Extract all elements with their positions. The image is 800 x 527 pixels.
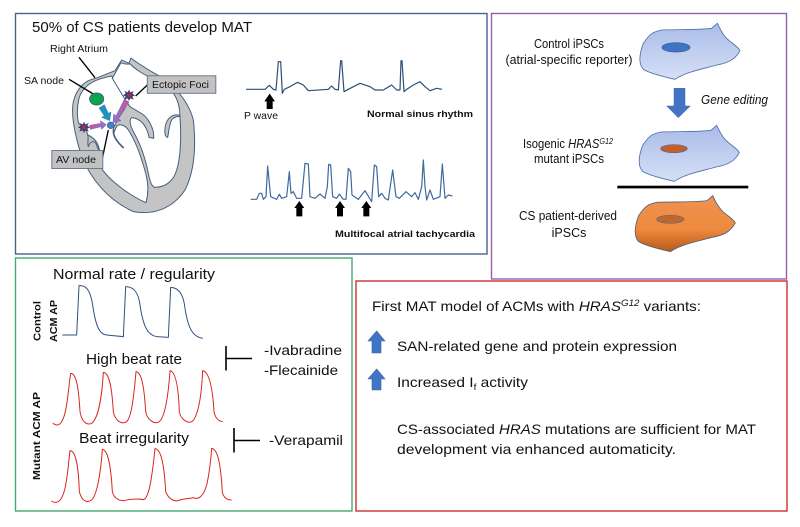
label: AV node: AV node [56,154,96,166]
icon: patient-derived cell [635,196,735,252]
heading: Normal rate / regularity: Normal rate / regularity [53,267,216,283]
chart: normal sinus rhythm ECG [246,61,442,109]
text: conclusion statement [397,421,756,457]
label: Control ACM AP: Control [32,301,44,341]
text: CS patient-derived iPSCs [519,209,617,240]
text: isogenic mutant iPSCs: Isogenic HRAS [523,137,603,151]
arrow: P wave [264,94,275,109]
text: gene editing: Gene editing [701,93,768,107]
text: isogenic mutant iPSCs: mutant iPSCs [534,152,604,166]
icon: ectopic focus upper [123,90,135,101]
text: increased If activity: Increased I [397,374,466,390]
panel: iPSC lines [492,14,786,279]
panel: conclusions [356,281,787,511]
icon: inhibition bar upper [226,346,252,370]
label: Multifocal atrial tachycardia: Multifocal atrial tachycardia [335,229,476,240]
heading: First MAT model: variants: [639,298,701,314]
text: increased If activity: activity [476,374,528,390]
divider line [617,186,748,188]
label: SA node: SA node [24,75,64,87]
arrows: MAT P waves [294,201,371,216]
icon: up arrow If [368,369,385,390]
text: control iPSCs [506,37,632,67]
text: CS patient-derived iPSCs: iPSCs [552,226,586,240]
label: Normal sinus rhythm: Normal sinus rhythm [367,109,473,120]
text: Ivabradine and Flecainide [264,342,342,378]
chart: multifocal atrial tachycardia ECG [251,160,452,216]
text: SAN-related expression: SAN-related gene and protein expression [397,338,677,354]
text: Ivabradine and Flecainide: -Ivabradine [264,342,342,358]
icon: ectopic focus lower [78,122,90,133]
arrow: lower focus to AV node [90,121,106,129]
leader lines [69,57,147,158]
heart diagram [69,57,195,213]
icon: inhibition bar lower [234,428,260,452]
icon: AV node [107,122,114,129]
panel: MAT clinical background [16,14,487,254]
chart: control AP trace [62,286,203,338]
arrow: SA node to AV node [99,105,111,121]
heading: First MAT model: G12 [621,298,639,308]
icon: control cell [640,23,740,79]
text: control iPSCs: (atrial-specific reporter) [506,53,632,67]
label: P wave: P wave [244,111,278,122]
label: Ectopic Foci [147,76,216,93]
label: Right Atrium: Right Atrium [50,43,108,55]
text: conclusion statement: CS-associated HRAS mutations are sufficient for MAT [397,421,756,437]
label: Ectopic Foci: Ectopic Foci [152,79,209,91]
heading: High beat rate: High beat rate [86,352,182,368]
text: Verapamil: -Verapamil [269,432,343,448]
text: isogenic mutant iPSCs [523,137,613,166]
label: Mutant ACM AP: Mutant ACM AP [32,392,43,480]
heading: First MAT model: First MAT model of ACMs with HRAS [372,298,618,314]
text: increased If activity: f [474,382,477,392]
icon: isogenic mutant cell [639,125,739,181]
chart: mutant AP beat irregularity [51,448,232,502]
text: conclusion statement: development via enhanced automaticity. [397,441,676,457]
text: isogenic mutant iPSCs: G12 [599,137,613,146]
heading: 50% of CS patients develop MAT: 50% of CS patients develop MAT [32,19,252,36]
text: control iPSCs: Control iPSCs [534,37,604,51]
text: Ivabradine and Flecainide: -Flecainide [264,362,338,378]
chart: mutant AP high beat rate [53,371,223,425]
icon: up arrow SAN [368,331,385,353]
panel: action potentials [16,258,352,511]
text: CS patient-derived iPSCs: CS patient-derived [519,209,617,223]
arrow: upper focus to AV node [113,99,129,123]
heading: Beat irregularity: Beat irregularity [79,431,190,447]
icon: SA node [90,93,104,105]
label: AV node [52,150,103,168]
label: Control ACM AP [32,300,60,342]
label: Control ACM AP: ACM AP [49,300,60,342]
arrow: gene editing [667,88,690,118]
